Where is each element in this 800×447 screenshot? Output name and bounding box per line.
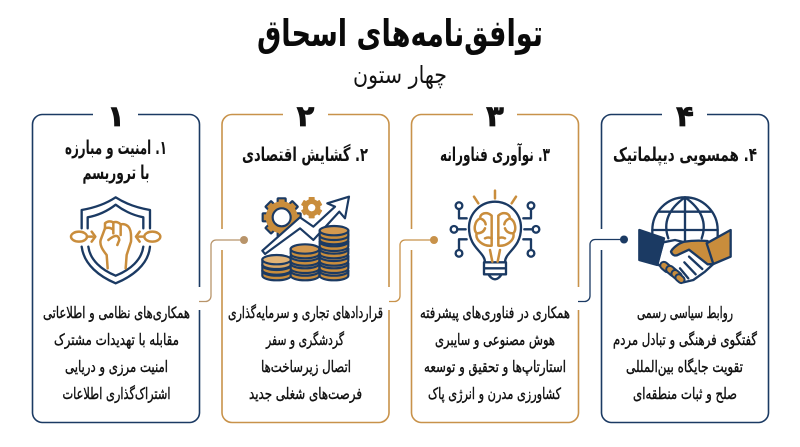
icon: gears, arrow and coins [262,197,349,280]
item list: قراردادهای تجاری و سرمایه‌گذاری [228,304,383,323]
item list: اشتراک‌گذاری اطلاعات [62,385,170,403]
card border [602,114,768,422]
card border [32,114,200,422]
icon: light bulb with brain [451,191,539,279]
item list: روابط سیاسی رسمی [637,304,733,323]
item list: فرصت‌های شغلی جدید [249,385,362,403]
item list: مقابله با تهدیدات مشترک [54,331,179,350]
item list: گفتگوی فرهنگی و تبادل مردم [613,331,757,350]
item list: همکاری‌های نظامی و اطلاعاتی [43,304,190,323]
item list: هوش مصنوعی و سایبری [435,331,555,350]
subtitle: چهار ستون [353,61,447,89]
item list [43,304,190,403]
number 4: ۴ [676,99,694,133]
panel: technology [412,99,579,422]
panel: diplomacy [602,99,768,422]
number 1: ۱ [107,99,125,133]
item list: تقویت جایگاه بین‌المللی [626,358,743,376]
heading: ۳. نوآوری فناورانه [440,142,550,166]
icon: shield with fist and broken chain [71,197,160,283]
item list: صلح و ثبات منطقه‌ای [633,385,737,404]
number 3: ۳ [486,99,504,133]
item list: کشاورزی مدرن و انرژی پاک [428,385,561,404]
item list: گردشگری و سفر [265,331,344,350]
icon: globe and handshake [639,197,731,284]
item list [613,304,757,404]
heading line 2: با تروریسم [82,162,150,184]
connector: card 1 to card 2 [199,236,248,302]
item list [420,304,570,404]
item list: استارتاپ‌ها و تحقیق و توسعه [424,358,566,377]
card border [222,114,389,422]
item list: امنیت مرزی و دریایی [65,358,168,377]
item list: همکاری در فناوری‌های پیشرفته [420,304,570,323]
panel: security [32,99,200,422]
number 2: ۲ [297,99,315,133]
connector: card 3 to card 4 [578,236,628,302]
panel: economy [222,99,389,422]
connector: card 2 to card 3 [389,236,438,302]
item list: اتصال زیرساخت‌ها [261,358,351,376]
title: توافق‌نامه‌های اسحاق [257,12,543,55]
heading: ۴. همسویی دیپلماتیک [613,144,757,166]
card border [412,114,579,422]
item list [228,304,383,403]
heading: ۲. گشایش اقتصادی [242,143,368,166]
heading: ۱. امنیت و مبارزه [65,137,167,159]
